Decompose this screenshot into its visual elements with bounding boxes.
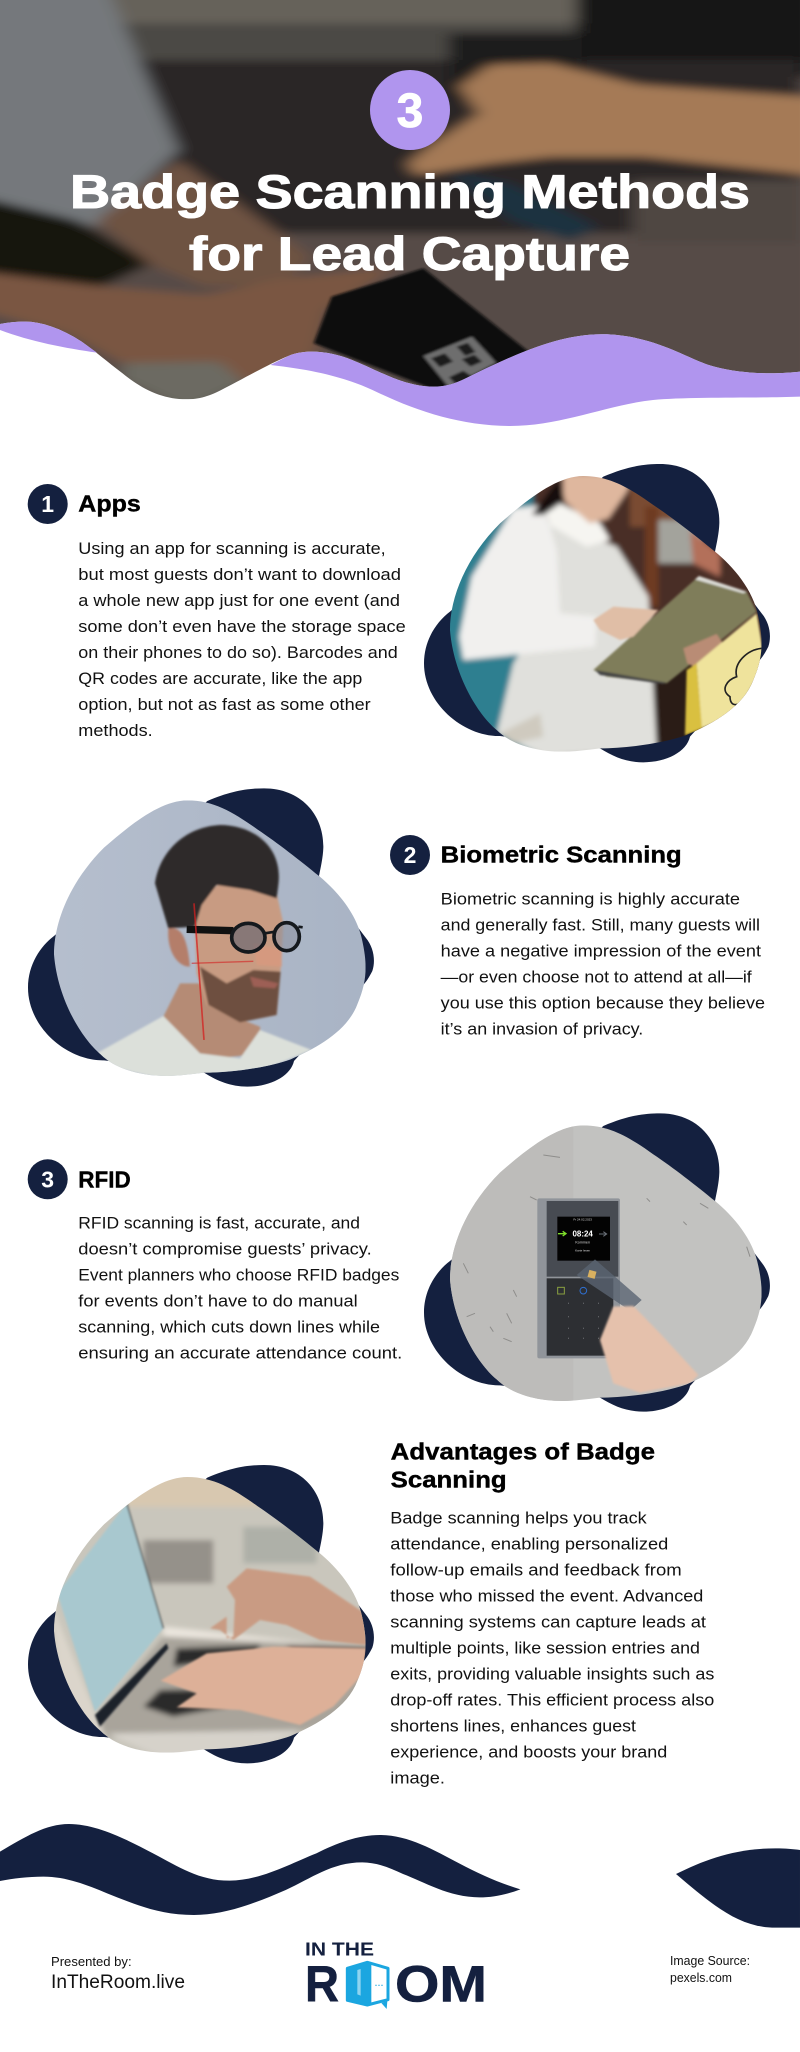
panel: biometric scanning bbox=[28, 788, 765, 1090]
body text: apps: on their phones to do so). Barcodes and bbox=[78, 643, 398, 662]
photo blob: RFID card reader bbox=[424, 1113, 783, 1417]
body text: RFID: Event planners who choose RFID badges bbox=[78, 1266, 399, 1285]
body text: apps: some don’t even have the storage space bbox=[78, 617, 406, 636]
logo: In The Room: IN THE bbox=[305, 1939, 374, 1960]
body text: advantages: image. bbox=[390, 1768, 445, 1787]
panel: RFID bbox=[28, 1113, 783, 1417]
body text: RFID bbox=[78, 1214, 402, 1363]
heading: advantages: Advantages of Badge bbox=[391, 1438, 655, 1464]
footer: presented by: InTheRoom.live bbox=[51, 1972, 185, 1993]
number badge 3: 3 bbox=[41, 1166, 54, 1192]
body text: advantages: attendance, enabling personalized bbox=[390, 1534, 668, 1553]
number badge 3 bbox=[28, 1159, 68, 1199]
footer: image source bbox=[670, 1953, 750, 1985]
photo blob: hands typing on laptop bbox=[28, 1465, 383, 1763]
body text: advantages: multiple points, like session entries and bbox=[390, 1638, 700, 1657]
purple wave main bbox=[270, 334, 800, 426]
body text: RFID: doesn’t compromise guests’ privacy. bbox=[78, 1240, 372, 1259]
body text: biometric scanning: and generally fast. Still, many guests will bbox=[441, 915, 760, 934]
body text: advantages bbox=[390, 1508, 714, 1787]
heading: biometric scanning: Biometric Scanning bbox=[441, 841, 682, 867]
photo blob: man face scan bbox=[28, 788, 383, 1090]
body text: biometric scanning: have a negative impression of the event bbox=[441, 941, 761, 960]
footer: presented by: Presented by: bbox=[51, 1954, 132, 1969]
heading: advantages: Scanning bbox=[391, 1466, 507, 1492]
footer: image source: Image Source: bbox=[670, 1953, 750, 1968]
footer: presented by bbox=[51, 1954, 185, 1993]
number badge 1 bbox=[28, 484, 68, 524]
body text: advantages: experience, and boosts your brand bbox=[390, 1742, 667, 1761]
header photo: hands scanning a QR code bbox=[0, 0, 800, 420]
number badge bbox=[370, 70, 450, 150]
body text: advantages: drop-off rates. This efficient process also bbox=[390, 1690, 714, 1709]
photo blob: RFID card reader: Kommen bbox=[575, 1241, 590, 1245]
heading: apps: Apps bbox=[78, 491, 141, 517]
number badge 2 bbox=[390, 835, 430, 875]
body text: biometric scanning: —or even choose not to attend at all—if bbox=[441, 967, 752, 986]
number badge 1: 1 bbox=[41, 491, 54, 517]
body text: RFID: RFID scanning is fast, accurate, and bbox=[78, 1214, 360, 1233]
footer wave main bbox=[0, 1824, 520, 1915]
body text: apps: methods. bbox=[78, 721, 153, 740]
photo blob: RFID card reader: Karte lesen bbox=[575, 1249, 591, 1253]
body text: advantages: Badge scanning helps you track bbox=[390, 1508, 647, 1527]
body text: RFID: for events don’t have to do manual bbox=[78, 1292, 358, 1311]
body text: apps: QR codes are accurate, like the app bbox=[78, 669, 362, 688]
body text: advantages: scanning systems can capture leads at bbox=[390, 1612, 706, 1631]
footer wave right bbox=[676, 1848, 800, 1928]
body text: biometric scanning: you use this option because they believe bbox=[441, 993, 765, 1012]
photo blob: RFID card reader: Fr 24.02.2023 bbox=[573, 1218, 592, 1222]
purple wave left bbox=[0, 322, 97, 353]
heading: RFID: RFID bbox=[78, 1166, 131, 1192]
photo blob: RFID card reader: 08:24 bbox=[572, 1230, 593, 1239]
icon: door bbox=[347, 1962, 388, 2009]
title: for Lead Capture bbox=[189, 227, 630, 280]
body text: apps: but most guests don’t want to download bbox=[78, 565, 401, 584]
logo: In The Room: R bbox=[305, 1956, 339, 2013]
number badge 2: 2 bbox=[404, 842, 416, 868]
header section bbox=[0, 0, 800, 426]
body text: RFID: scanning, which cuts down lines while bbox=[78, 1318, 380, 1337]
body text: advantages: exits, providing valuable insights such as bbox=[390, 1664, 714, 1683]
body text: apps bbox=[78, 539, 406, 740]
title: Badge Scanning Methods bbox=[70, 165, 750, 218]
body text: biometric scanning: it’s an invasion of privacy. bbox=[441, 1019, 643, 1038]
body text: apps: option, but not as fast as some other bbox=[78, 695, 371, 714]
body text: biometric scanning bbox=[441, 889, 765, 1038]
logo: In The Room bbox=[305, 1939, 487, 2013]
body text: biometric scanning: Biometric scanning is highly accurate bbox=[441, 889, 740, 908]
photo blob: woman with tablet bbox=[424, 464, 773, 762]
panel: advantages of badge scanning bbox=[28, 1438, 714, 1787]
title bbox=[70, 165, 750, 280]
panel: apps bbox=[28, 464, 773, 762]
number badge: 3 bbox=[397, 85, 423, 138]
body text: apps: Using an app for scanning is accurate, bbox=[78, 539, 386, 558]
body text: advantages: follow-up emails and feedback from bbox=[390, 1560, 682, 1579]
body text: RFID: ensuring an accurate attendance count. bbox=[78, 1344, 402, 1363]
footer: image source: pexels.com bbox=[670, 1970, 732, 1985]
body text: apps: a whole new app just for one event (and bbox=[78, 591, 400, 610]
heading: advantages bbox=[391, 1438, 655, 1492]
body text: advantages: shortens lines, enhances guest bbox=[390, 1716, 636, 1735]
logo: In The Room: OM bbox=[395, 1956, 487, 2013]
body text: advantages: those who missed the event. Advanced bbox=[390, 1586, 703, 1605]
